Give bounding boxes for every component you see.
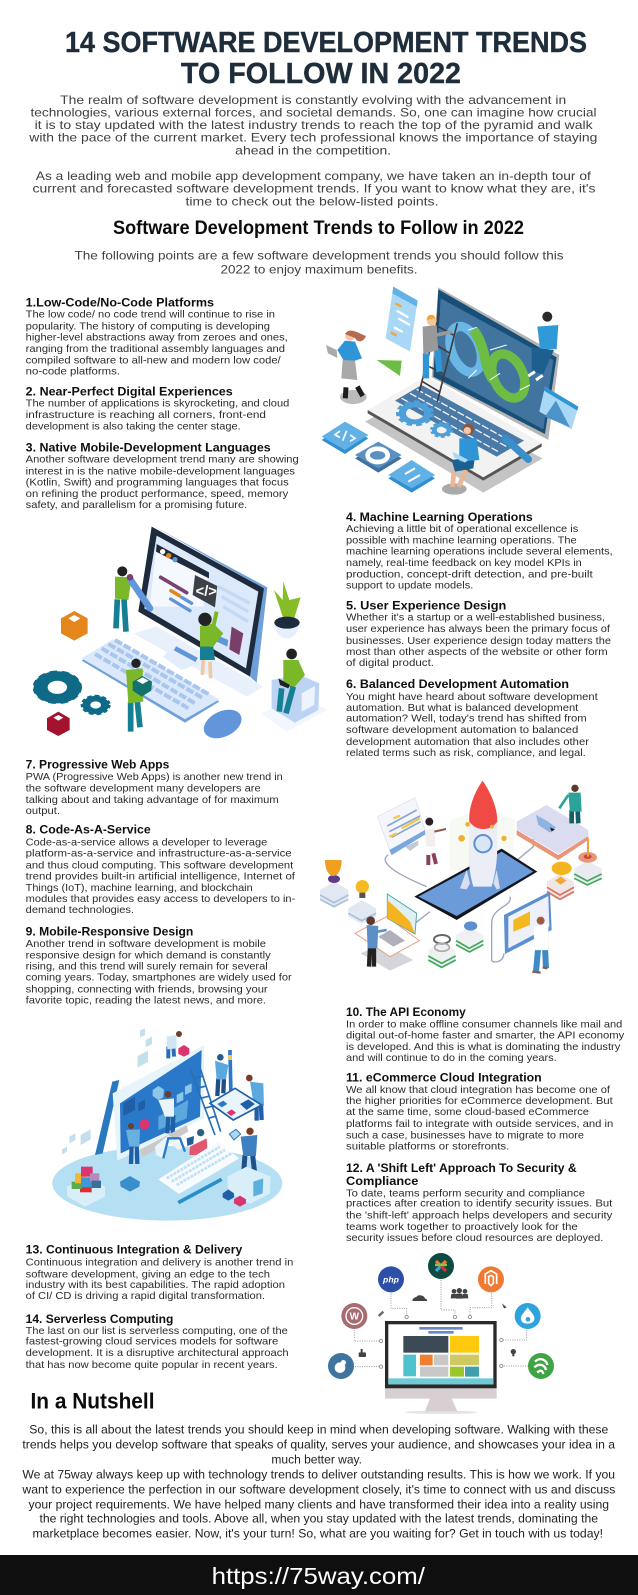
trend 5: user experience has always been the primary focus of [346,624,610,635]
icon: floating panel [386,287,418,352]
conclusion text block [21,1422,615,1540]
trend 11: at the same time, some cloud-based eCommerce [346,1107,589,1118]
trend 1: The low code/ no code trend will continue to rise in [26,310,275,321]
trend 4: machine learning operations include several elements, [346,547,613,558]
trophy on stack [320,860,348,907]
figure: man with box [126,659,152,732]
trend 10: 10. The API Economy [346,1007,466,1019]
trend 6 [346,679,598,759]
connectors [354,1280,528,1367]
conclusion text block: want to experience the perfection in our software development closely, it's time to connect with us and discuss [21,1482,615,1496]
conclusion text block: trends helps you develop software that speaks of quality, serves your audience, and showcases your idea in a [22,1437,615,1451]
table with laptop [517,805,588,860]
trend 12: practices after creation to identify security issues. But [346,1199,612,1210]
title: TO FOLLOW IN 2022 [181,58,461,90]
illustration: devops laptop [322,287,578,495]
trend 7: output. [26,806,60,817]
trend 6: You might have heard about software development [346,692,598,703]
illustration: rocket launching from phone [320,781,602,973]
trend 10: digital out-of-home faster and smarter, the API economy [346,1031,625,1042]
phone [414,849,537,920]
conclusion text block: So, this is all about the latest trends you should keep in mind when developing software. Walking with these [29,1422,609,1436]
trend 4: support to update models. [346,581,473,592]
trend 6: 6. Balanced Development Automation [346,679,569,691]
trend 4: 4. Machine Learning Operations [346,512,533,524]
trend 7: 7. Progressive Web Apps [26,760,169,772]
trend 4: possible with machine learning operations. The [346,535,577,546]
figure: woman with laptop [326,331,367,404]
icon: mouse [199,704,246,744]
intro text block: The realm of software development is constantly evolving with the advancement in [60,93,566,107]
conclusion text block: the right technologies and tools. Above all, when you stay updated with the latest trends, dominating the [40,1511,598,1525]
trend 8: Things (IoT), machine learning, and blockchain [26,883,253,894]
code monitor [377,798,426,855]
trend 1: popularity. The history of computing is developing [26,321,270,332]
trend 9: responsive design for which demand is constantly [26,950,272,961]
ladder [190,1067,221,1135]
figure: woman at screen [198,612,223,678]
rocket [458,781,507,889]
footer bar [0,1555,638,1595]
figure: man sitting on screen [528,312,558,380]
trend 3 [26,442,299,511]
trend 8: platform-as-a-service and infrastructure-as-a-service [26,849,292,860]
keyboard [82,639,219,723]
trend 6: development automation that also includes other [346,737,590,748]
trend 9: Another trend in software development is mobile [26,939,266,950]
trend 1: 1.Low-Code/No-Code Platforms [26,298,214,310]
figure: man on cube [261,649,327,732]
trend 1: ranging from the traditional assembly languages and [26,344,285,355]
trend 8: and thus cloud computing. This software development [26,860,293,871]
trend 2 [26,386,290,432]
trend 5: of digital product. [346,658,434,669]
figure: woman seated [442,424,479,495]
trend 4: Achieving a little bit of operational excellence is [346,524,578,535]
pedestal and cubes [223,1167,271,1207]
figure: man with pencil [115,566,150,632]
illustration: team building website [52,1028,282,1221]
conclusion text block: your project requirements. We have helped many clients and have transformed their idea into a reality using [28,1497,609,1511]
icon: code tag [193,575,217,607]
trend 8: modules that provides easy access to developers to in- [26,894,295,905]
icon: orange cube [61,611,88,641]
trend 8: demand technologies. [26,905,134,916]
trend 13: of CI/ CD is driving a rapid digital transformation. [26,1291,265,1302]
trend 2: 2. Near-Perfect Digital Experiences [26,386,233,398]
trend 13: Continuous integration and delivery is another trend in [26,1257,293,1268]
trend 11: the higher priorities for eCommerce development. But [346,1096,613,1107]
trend 13 [26,1245,293,1302]
trend 6: software development automation to balanced [346,725,579,736]
trend 3: 3. Native Mobile-Development Languages [26,442,271,454]
trend 3: on refining the product performance, speed, memory [26,489,289,500]
target on stack [574,838,602,886]
cables [385,837,533,962]
icon: right platform [528,1353,554,1379]
intro text block: As a leading web and mobile app development company, we have taken an in-depth tour of [36,169,592,183]
trend 8 [26,825,295,916]
section intro: The following points are a few software development trends you should follow this [74,248,564,262]
trend 12 [346,1163,613,1244]
title [65,27,587,90]
trend 2: The number of applications is skyrocketing, and cloud [26,399,290,410]
trend 5 [346,601,611,669]
trend 8: Code-as-a-service allows a developer to leverage [26,838,268,849]
intro text block: it is to stay updated with the latest industry trends to reach the top of the pyramid and walk [35,118,593,132]
trend 10 [346,1007,625,1064]
heading: in a nutshell: In a Nutshell [30,1388,154,1413]
trend 14: that has now become quite popular in recent years. [26,1360,278,1371]
trend 11: 11. eCommerce Cloud Integration [346,1073,542,1085]
icon: code tag: </> [196,584,217,600]
trend 11: such a case, businesses have to migrate to more [346,1130,584,1141]
trend 3: interest in is the native mobile-development languages [26,466,295,477]
trend 14: fastest-growing cloud services models for software [26,1337,279,1348]
icon: drupal [515,1303,541,1329]
figure: man on ladder [419,313,457,402]
section intro: 2022 to enjoy maximum benefits. [220,262,418,276]
trend 11: suitable platforms or storefronts. [346,1141,509,1152]
trend 9: coming years. Today, smartphones are widely used for [26,973,292,984]
green stacks [428,921,483,969]
trend 7 [26,760,283,817]
icon: wrench [505,438,528,459]
keyboard [158,1142,239,1194]
icon: green chart [377,360,402,376]
icon: left platform [328,1353,354,1379]
trend 13: software development, giving an edge to the tech [26,1269,270,1280]
icon: wordpress [341,1303,367,1329]
trend 11: platforms fail to integrate with outside services, and in [346,1119,613,1130]
icon: image window [539,387,578,429]
title: 14 SOFTWARE DEVELOPMENT TRENDS [65,27,587,59]
trend 10: is developed. And this is what is dominating the industry [346,1042,621,1053]
small icons [359,1288,516,1357]
intro text block [28,93,597,209]
icon: joomla [428,1253,454,1279]
trend 2: infrastructure is reaching all corners, front-end [26,410,266,421]
illustration: CMS platforms around monitor [328,1253,554,1414]
trend 14: The last on our list is serverless computing, one of the [26,1326,288,1337]
icon: magento [478,1266,504,1292]
intro text block: with the pace of the current market. Every tech professional knows the importance of staying [28,131,597,145]
trend 6: automation. But what is balanced development [346,703,578,714]
trend 4 [346,512,613,592]
icon: gears [35,672,109,714]
sharpener [120,1176,140,1192]
floating squares [62,1028,152,1154]
trend 10: In order to make offline consumer channels like mail and [346,1019,623,1030]
trend 7: PWA (Progressive Web Apps) is another new trend in [26,772,283,783]
trend 7: the software development many developers are [26,784,261,795]
tablet with man [504,892,552,973]
trend 12: 12. A 'Shift Left' Approach To Security & [346,1163,577,1175]
website screen [95,1045,204,1161]
trend 1: higher-level abstractions away from zeroes and ones, [26,333,288,344]
trend 9: 9. Mobile-Responsive Design [26,927,193,939]
intro text block: time to check out the below-listed points. [186,195,438,209]
trend 8: 8. Code-As-A-Service [26,825,151,837]
trend 12: the 'shift-left' approach helps developers and security [346,1211,613,1222]
trend 9: favorite topic, reading the latest news, and more. [26,995,266,1006]
trend 14 [26,1314,289,1371]
stool and seated figure [139,1125,207,1158]
icons: code, gear and sync tiles [322,422,435,493]
trend 5: businesses. User experience design today matters the [346,636,611,647]
trend 5: Whether it's a startup or a well-established business, [346,613,605,624]
conclusion text block: We at 75way always keep up with technology trends to deliver outstanding results. This is how we work. If you [22,1467,615,1481]
trend 14: 14. Serverless Computing [26,1314,173,1326]
trend 12: security issues before cloud resources are deployed. [346,1233,603,1244]
trend 3: Another software development trend many are showing [26,454,299,465]
trend 13: 13. Continuous Integration & Delivery [26,1245,243,1257]
icon: plant [274,582,301,638]
section intro [74,248,564,276]
trend 12: To date, teams perform security and compliance [346,1188,585,1199]
illustration: developers at monitor [35,526,327,744]
trend 13: industry with its best capabilities. The rapid adoption [26,1280,285,1291]
intro text block: current and forecasted software development trends. If you want to know what they are, it's [32,182,596,196]
trend 11 [346,1073,613,1152]
trend 3: safety, and parallelism for a promising future. [26,500,247,511]
trend 6: related terms such as risk, compliance, and legal. [346,748,586,759]
figure: woman pointing [425,818,446,865]
trend 11: We all know that cloud integration has become one of [346,1085,610,1096]
pencil [178,1179,222,1203]
icon: wordpress: W [350,1312,360,1323]
trend 1 [26,298,288,378]
trend 5: 5. User Experience Design [346,601,506,613]
monitor [385,1321,497,1414]
trend 3: (Kotlin, Swift) and programming languages that focus [26,478,289,489]
icon: php: php [382,1275,400,1285]
figure: man in teal [559,785,582,823]
conclusion text block: much better way. [271,1452,362,1466]
footer bar: https://75way.com/ [212,1563,426,1589]
trend 9: shopping, connecting with friends, browsing your [26,984,268,995]
icon: php [378,1266,404,1292]
trend 1: no-code platforms. [26,367,120,378]
figure: woman at chart desk [355,894,419,971]
figures [126,1031,264,1177]
trend 10: and will continue to do in the coming years. [346,1053,557,1064]
intro text block: technologies, various external forces, and societal demands. So, one can imagine how crucial [30,106,596,120]
trend 2: development is also taking the center stage. [26,421,241,432]
blocks box [67,1167,105,1207]
trend 12: Compliance [346,1176,418,1188]
trend 4: production, concept-drift detection, and pre-built [346,570,593,581]
trend 5: most than other aspects of the website or other form [346,647,608,658]
trend 1: compiled software to all-new and modern low code/ [26,355,281,366]
conclusion text block: marketplace becomes easier. Now, it's your turn! So, what are you waiting for? Get in touch with us today! [32,1526,603,1540]
trend 8: trend provides built-in artificial intelligence, Internet of [26,871,295,882]
trend 6: automation? Well, today's trend has shifted from [346,713,587,724]
icon: red cube [47,712,70,736]
icon: gears [398,402,452,437]
trend 7: talking about and taking advantage of for maximum [26,795,279,806]
trend 14: development. It is a disruptive architectural approach [26,1348,289,1359]
trend 12: teams work together to proactively look for the [346,1222,578,1233]
bulb on stack [348,880,376,924]
section heading: Software Development Trends to Follow in 2022 [113,218,524,239]
trend 9 [26,927,292,1006]
coin on stack [547,862,574,901]
intro text block: ahead in the competition. [235,144,391,158]
trend 9: rising, and this trend will surely remain for several [26,962,268,973]
trend 4: namely, real-time feedback on key model KPIs in [346,558,582,569]
floor plan mat [210,1050,262,1120]
